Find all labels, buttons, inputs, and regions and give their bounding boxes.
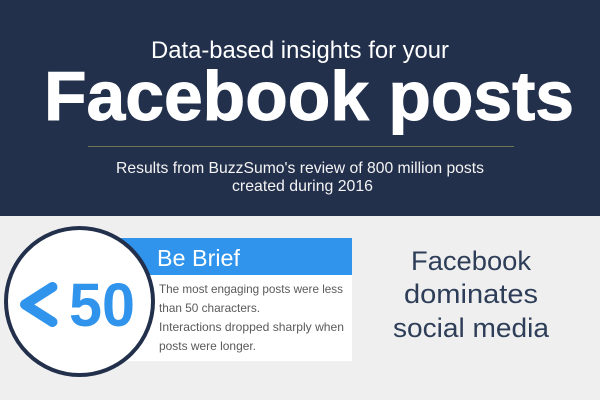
icon: less-than sign bbox=[25, 287, 52, 322]
text block: facebook dominates: Facebook bbox=[411, 246, 532, 276]
subtitle: Results from BuzzSumo's review of 800 million posts bbox=[116, 160, 484, 177]
stat circle bbox=[6, 228, 153, 375]
card heading: Be Brief bbox=[157, 245, 241, 271]
subtitle: created during 2016 bbox=[232, 178, 373, 195]
stat number: 50 bbox=[69, 271, 135, 339]
card text: The most engaging posts were less bbox=[159, 282, 343, 296]
text block: facebook dominates bbox=[393, 246, 550, 343]
card text: Interactions dropped sharply when bbox=[159, 320, 344, 334]
card text: than 50 characters. bbox=[159, 301, 260, 315]
panel: header bbox=[0, 0, 600, 216]
panel: be brief bbox=[6, 228, 352, 375]
title: Facebook posts bbox=[44, 57, 574, 135]
text block: facebook dominates: dominates bbox=[404, 279, 538, 309]
card text: posts were longer. bbox=[159, 339, 256, 353]
text block: facebook dominates: social media bbox=[393, 313, 550, 343]
card body bbox=[120, 238, 352, 361]
card header bbox=[120, 238, 352, 275]
card text bbox=[159, 282, 344, 353]
subtitle bbox=[116, 160, 484, 195]
heading: intro line: Data-based insights for your bbox=[151, 37, 449, 64]
